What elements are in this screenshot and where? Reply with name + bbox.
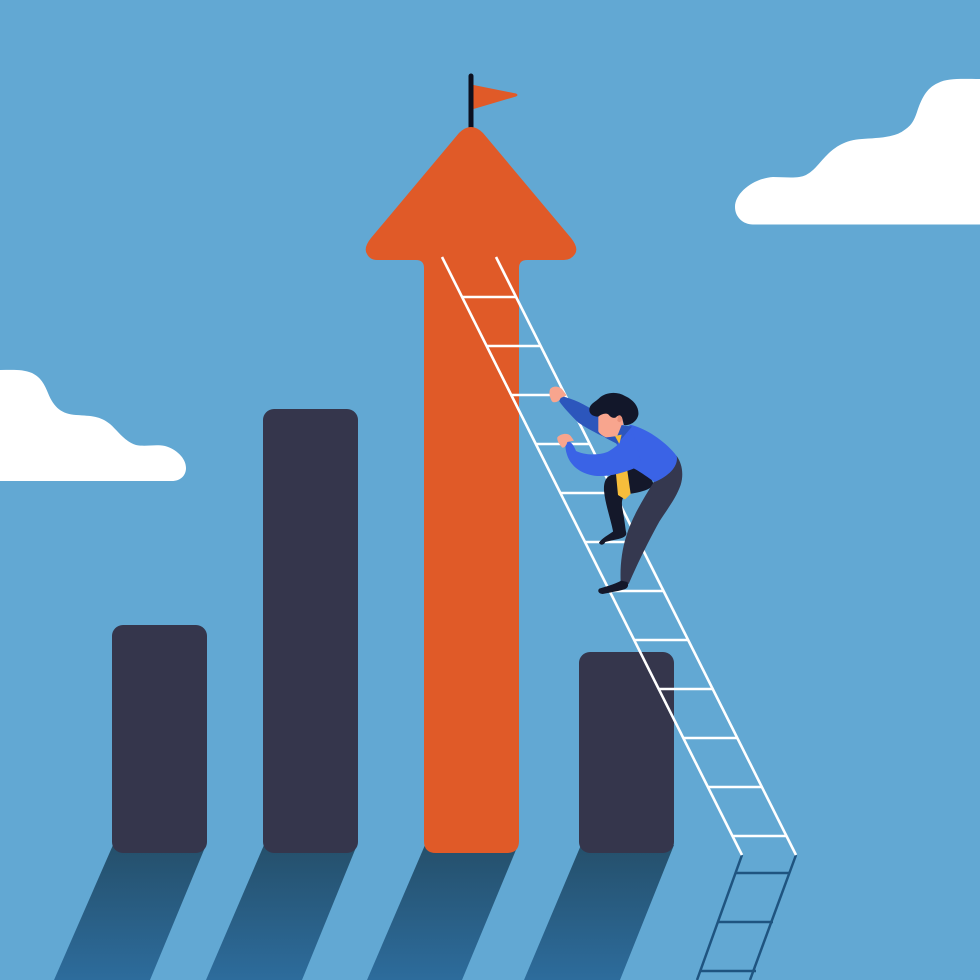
bar 2 (263, 409, 358, 853)
bar 4 (579, 652, 674, 853)
cloud: left (0, 370, 186, 481)
ladder: shadow part below the top (697, 855, 796, 980)
near arm (565, 433, 642, 476)
hair (589, 393, 638, 425)
collar (605, 425, 632, 444)
bar shadows on the ground (54, 845, 674, 980)
ladder: white rails and rungs (442, 257, 796, 855)
bar 1 (112, 625, 207, 853)
near leg (621, 456, 682, 584)
cloud: top right (735, 79, 980, 224)
flag (471, 76, 518, 127)
ear (617, 415, 622, 422)
far shoe (599, 530, 626, 545)
businessman climbing (549, 387, 682, 594)
torso (615, 425, 677, 482)
far leg (604, 468, 654, 533)
face (598, 412, 623, 437)
near hand (557, 434, 574, 448)
growth arrow (366, 127, 576, 853)
tie (615, 435, 631, 499)
far arm (559, 396, 620, 443)
far hand (549, 387, 567, 402)
near shoe (598, 581, 628, 594)
